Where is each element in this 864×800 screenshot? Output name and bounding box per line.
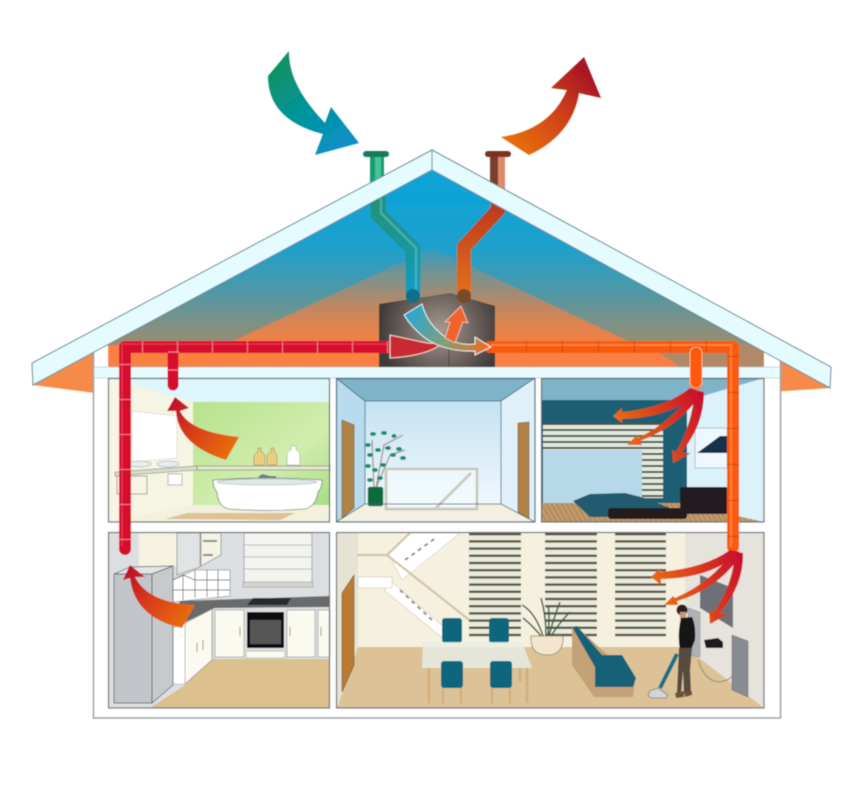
attic space [108, 170, 764, 367]
arrow: supply from red duct into core [390, 335, 445, 358]
speakers [688, 608, 748, 697]
panel: exhaust vent pipe [464, 151, 511, 296]
potted palm [522, 598, 570, 655]
room: bathroom [108, 378, 330, 522]
bedroom picture [695, 428, 727, 468]
bedroom floor [541, 503, 764, 522]
arrow: stale air out [501, 57, 601, 155]
kitchen floor [150, 659, 330, 708]
landing doors [342, 420, 529, 519]
supply duct: red [122, 344, 390, 549]
roof [32, 150, 831, 388]
wall cabinets [177, 533, 221, 575]
bed [573, 493, 687, 519]
sofa [572, 626, 636, 697]
refrigerator [114, 566, 173, 703]
house illustration [32, 51, 831, 718]
room: landing [336, 378, 535, 522]
cord [698, 660, 733, 682]
bedroom sofa [680, 487, 727, 514]
bottles [254, 446, 300, 465]
arrows: living room supply [651, 550, 743, 624]
bathroom mirror [132, 411, 177, 462]
person vacuuming [675, 604, 695, 698]
arrow: core counter-flow to orange duct [404, 304, 491, 355]
bath mat [165, 513, 295, 520]
ceiling band [94, 367, 780, 378]
kitchen window blind [243, 533, 313, 587]
room: bedroom [541, 378, 764, 522]
oven [247, 612, 284, 648]
panel: intake vent pipe [363, 151, 416, 296]
landing glass railing [386, 469, 477, 509]
arrow: fresh air in [268, 51, 359, 155]
living room floor [337, 647, 764, 708]
room: living and dining [336, 532, 764, 708]
base cabinets [173, 609, 330, 684]
vacuum cleaner [648, 654, 677, 698]
kitchen tiles [173, 570, 230, 602]
arrow: core to exhaust [445, 306, 468, 343]
staircase [357, 533, 487, 640]
dining chairs front [441, 661, 512, 704]
bathtub [213, 474, 322, 510]
living room door [342, 575, 354, 692]
under-eave orange triangles [33, 350, 830, 393]
counter and hob [172, 596, 330, 625]
dining chairs back [442, 618, 509, 643]
arrow: kitchen extract [123, 565, 195, 628]
arrow: bathroom extract [167, 397, 239, 460]
potted plant [365, 431, 406, 506]
exterior wall [94, 345, 780, 718]
wall TV [700, 575, 733, 628]
bathroom shelf and counter [115, 461, 330, 494]
extract duct: orange [490, 345, 733, 547]
media box [704, 638, 723, 648]
arrows: bedroom supply [613, 388, 704, 463]
bedroom window blinds [543, 423, 663, 504]
room: kitchen [108, 532, 330, 708]
living room blinds [469, 533, 666, 637]
heat recovery unit box [379, 289, 495, 367]
dining table [422, 642, 532, 703]
